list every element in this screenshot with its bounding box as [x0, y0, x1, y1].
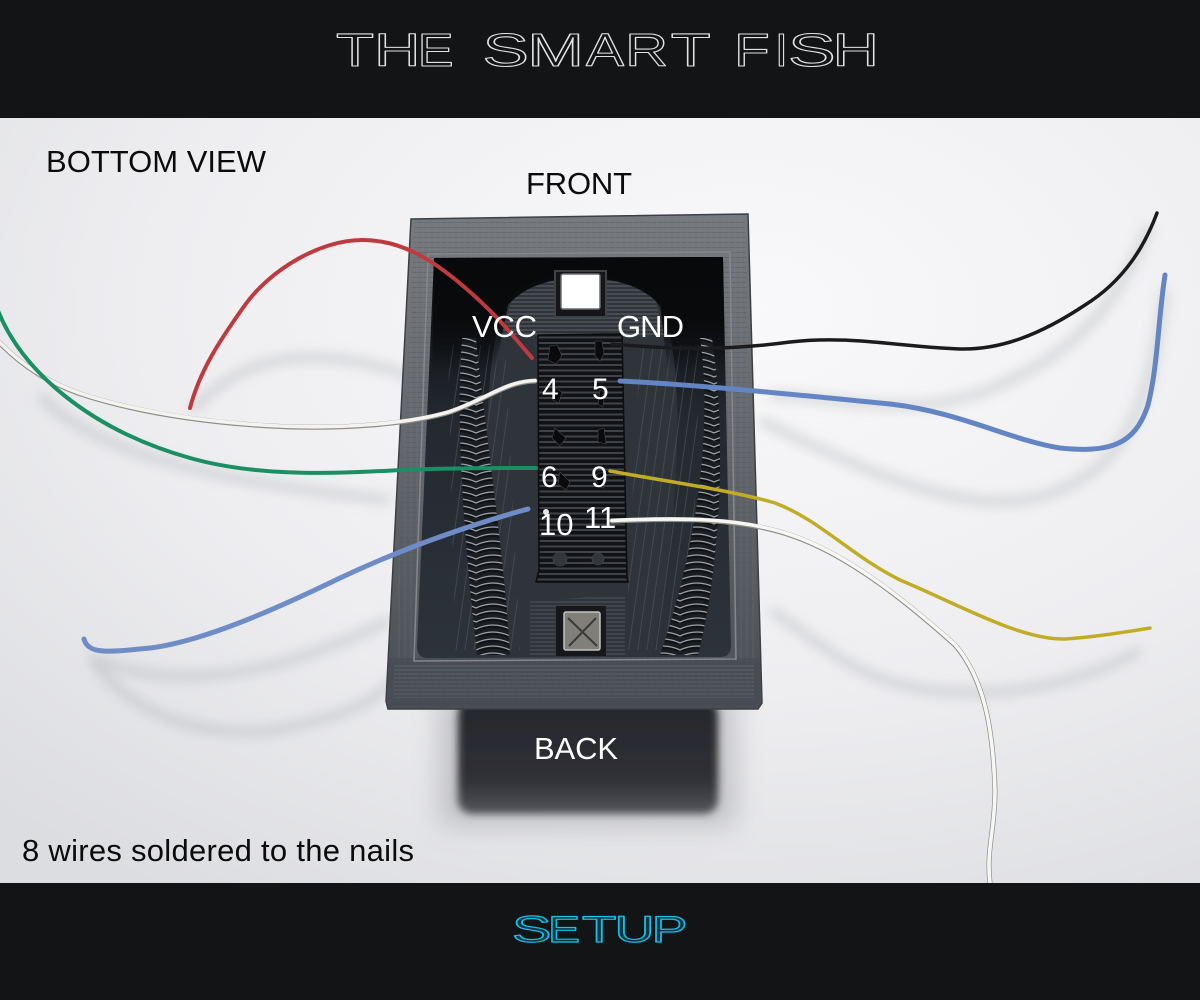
section label: setup: S — [512, 909, 551, 950]
title: S — [482, 24, 529, 76]
title: S — [788, 24, 836, 76]
top magnet — [555, 271, 606, 317]
box outer frame — [386, 214, 762, 709]
label: pin 6: 6 — [541, 461, 558, 494]
title: A — [586, 24, 624, 76]
label: VCC: VCC — [472, 309, 537, 344]
left grooves — [460, 338, 510, 655]
label: bottom view: BOTTOM VIEW — [46, 144, 267, 179]
title: F — [734, 24, 770, 76]
cavity — [417, 257, 731, 658]
caption: 8 wires soldered to the nails — [22, 833, 414, 868]
title: T — [336, 24, 374, 76]
title: E — [418, 24, 454, 76]
label: pin 5: 5 — [592, 373, 609, 406]
blue wire pin 10 — [84, 509, 528, 651]
label: pin 9: 9 — [591, 461, 608, 494]
right grooves — [660, 338, 720, 655]
yellow wire pin 9 — [610, 471, 1150, 639]
label: front: FRONT — [526, 166, 632, 201]
label: pin 10: 10 — [539, 507, 573, 542]
wires — [0, 213, 1165, 883]
green wire pin 6 — [0, 308, 536, 473]
blue wire pin 5 — [620, 275, 1165, 449]
section label: setup: U — [614, 909, 654, 950]
label: pin 4: 4 — [542, 373, 559, 406]
cavity top shadow — [432, 257, 725, 372]
red wire VCC — [190, 240, 532, 408]
title: H — [832, 24, 879, 76]
section label: setup: T — [582, 909, 616, 950]
white wire pin 11 — [612, 519, 995, 883]
bottom magnet — [530, 596, 625, 656]
cavity floor — [487, 275, 677, 655]
section label: setup: P — [652, 909, 687, 950]
black wire GND — [612, 213, 1157, 349]
title: H — [374, 24, 420, 76]
header band — [0, 0, 1200, 118]
section label: setup: E — [548, 909, 580, 950]
photo background — [0, 118, 1200, 883]
title: T — [671, 24, 711, 76]
label: back: BACK — [534, 731, 618, 766]
label: pin 11: 11 — [584, 500, 616, 535]
wire shadows — [40, 225, 1165, 732]
title: M — [527, 24, 584, 76]
box shadow — [440, 690, 735, 825]
title: I — [775, 24, 788, 76]
nails — [548, 341, 606, 566]
footer band — [0, 883, 1200, 1000]
central nail ridge — [536, 334, 628, 582]
white wire pin 4 — [0, 338, 535, 427]
3D printed box — [386, 214, 762, 709]
label: GND: GND — [617, 309, 684, 344]
title: R — [625, 24, 668, 76]
